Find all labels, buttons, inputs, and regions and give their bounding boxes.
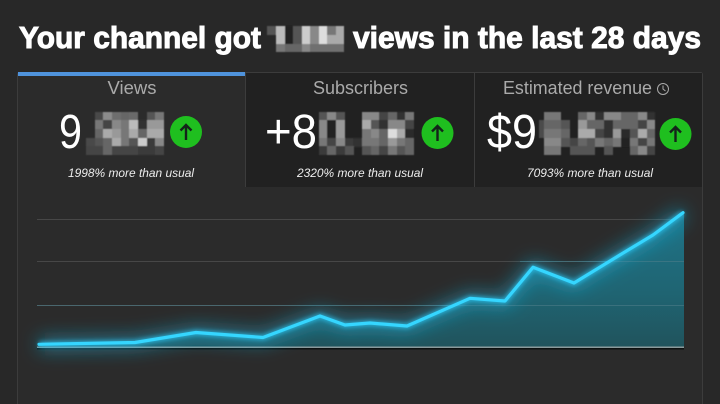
tab: views: Views [108,78,156,98]
icon: clock [658,84,668,94]
title: views in the last 28 days [353,20,701,55]
tab: subscribers [265,78,454,180]
tab: subscribers: 2320% more than usual [296,166,423,180]
pixelated subscribers number [319,112,414,155]
tab: views [59,78,202,180]
tight glow [39,213,683,344]
icon: up arrow [660,118,692,150]
tab: views: 1998% more than usual [68,166,194,180]
tab: estimated revenue: 7093% more than usual [527,166,653,180]
tab: estimated revenue [487,78,692,180]
tab: subscribers background [246,73,474,187]
pixelated views number [86,112,164,155]
baseline [37,346,684,348]
title [19,20,701,55]
icon: up arrow [170,116,202,148]
tab: subscribers: +8 [265,106,317,159]
pixelated revenue number [539,112,655,155]
tab: estimated revenue: $9 [487,106,537,159]
icon: up arrow [422,117,454,149]
tab: revenue background [475,73,702,187]
dashboard panel [18,72,702,404]
tab: estimated revenue: Estimated revenue [503,78,652,98]
tab: subscribers: Subscribers [313,78,408,98]
area under line [39,213,684,347]
line chart [37,213,684,350]
wide glow [39,213,683,344]
tab: views: 9 [59,106,82,159]
title: Your channel got [19,20,261,55]
pixelated title number [267,26,344,52]
active tab indicator [18,72,245,76]
data line [39,213,683,344]
